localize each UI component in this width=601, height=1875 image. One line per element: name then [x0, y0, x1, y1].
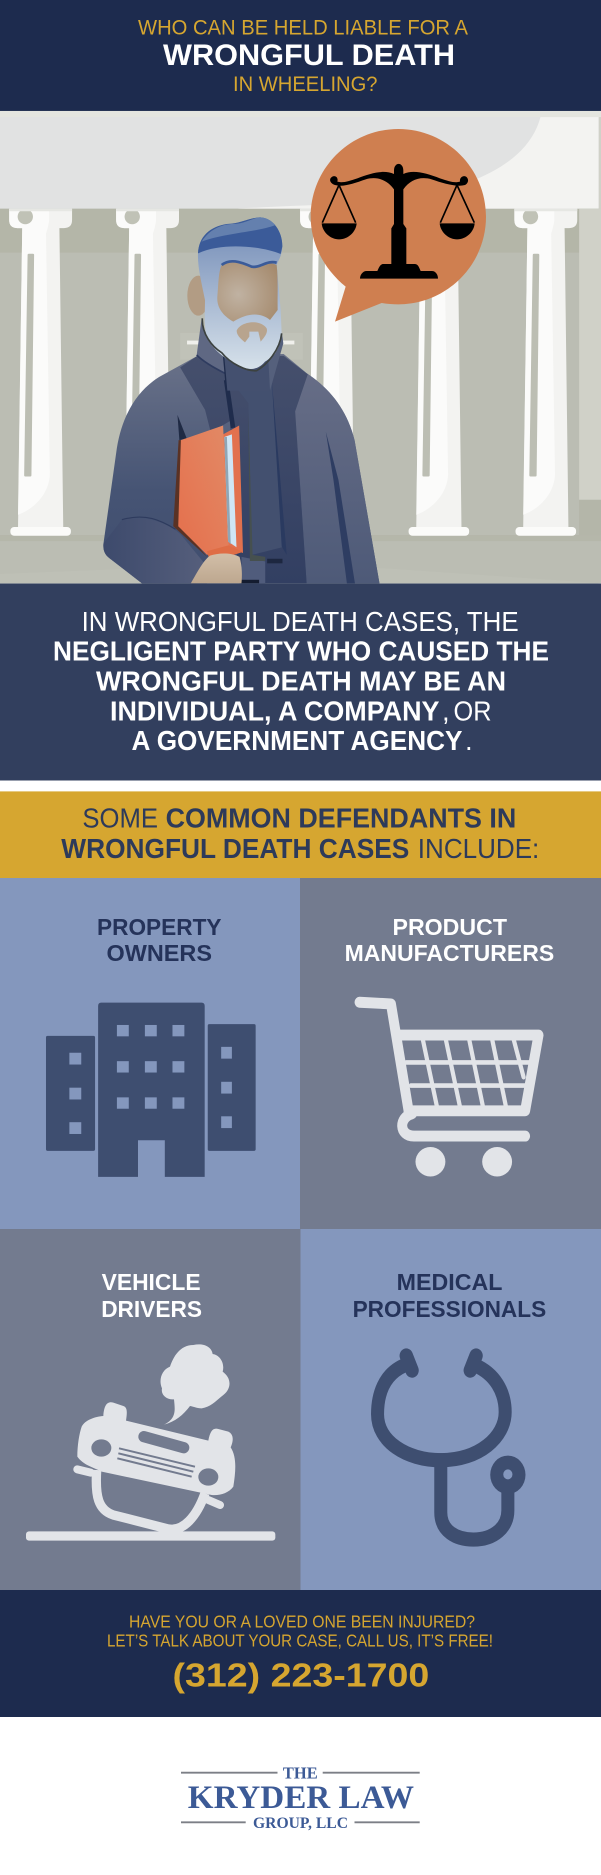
label: DRIVERS: [101, 1296, 202, 1322]
coat inner panel: [180, 356, 308, 583]
courthouse wall and floor: [0, 111, 601, 583]
panel: vehicle drivers: [0, 1229, 300, 1590]
logo: the kryder law group: [181, 1764, 420, 1832]
phone number: (312) 223-1700: [172, 1658, 429, 1695]
icon: overturned car with smoke: [26, 1344, 275, 1541]
line 5: .: [465, 725, 473, 756]
line 1: IN WRONGFUL DEATH CASES, THE: [82, 606, 519, 637]
heading line 1: SOME: [82, 803, 158, 834]
heading line 1: COMMON DEFENDANTS IN: [166, 803, 516, 834]
label: [101, 1269, 202, 1322]
header panel: [0, 0, 601, 111]
scales icon: [322, 164, 475, 279]
line 5: A GOVERNMENT AGENCY: [132, 725, 462, 756]
logo word: kryder law: KRYDER LAW: [188, 1780, 414, 1816]
label: PROPERTY: [97, 914, 222, 940]
icon: shopping cart: [360, 1002, 539, 1176]
label: PRODUCT: [392, 914, 507, 940]
sleeve: [103, 518, 207, 583]
line 4: INDIVIDUAL, A COMPANY: [110, 695, 440, 726]
scarf: [228, 377, 285, 555]
label: [97, 914, 222, 966]
blue cap of hair: [198, 217, 282, 254]
bubble: [311, 129, 486, 322]
heading line 2: WRONGFUL DEATH CASES: [61, 833, 409, 864]
line 4: OR: [454, 695, 492, 726]
panel: intro statement: [0, 584, 601, 780]
label: VEHICLE: [102, 1269, 201, 1295]
speech bubble with scales of justice: [311, 129, 486, 322]
mouth: [237, 322, 267, 342]
man in coat with book: [103, 354, 379, 583]
panel: courthouse illustration: [0, 111, 601, 583]
panel: defendants heading band: [0, 791, 601, 878]
coat lower left piece: [241, 557, 265, 583]
book: [173, 426, 243, 558]
label: MANUFACTURERS: [345, 940, 554, 966]
logo word: the: THE: [283, 1764, 318, 1782]
icon: buildings: [46, 1003, 256, 1177]
label: PROFESSIONALS: [353, 1296, 546, 1322]
coat: [103, 354, 379, 583]
man's head: [187, 217, 283, 391]
coat right fold: [326, 432, 355, 583]
coat right panel: [295, 374, 379, 583]
icon: stethoscope: [378, 1356, 525, 1540]
line 3: WRONGFUL DEATH MAY BE AN: [96, 665, 506, 696]
heading line: in wheeling: IN WHEELING?: [233, 72, 378, 96]
entablature: [0, 111, 601, 209]
hair and beard: [198, 217, 282, 369]
panel: call to action: [0, 1590, 601, 1717]
face: [217, 261, 278, 322]
label: [345, 914, 554, 966]
heading line: who can be held liable: WHO CAN BE HELD LIABLE FOR A: [138, 16, 469, 40]
logo word: group llc: GROUP, LLC: [253, 1815, 348, 1832]
label: OWNERS: [106, 940, 212, 966]
invitation text: LET’S TALK ABOUT YOUR CASE, CALL US, IT’S FREE!: [107, 1630, 493, 1650]
columns: [9, 209, 577, 536]
label: [353, 1269, 546, 1322]
line 2: NEGLIGENT PARTY WHO CAUSED THE: [53, 636, 549, 666]
question text: HAVE YOU OR A LOVED ONE BEEN INJURED?: [129, 1611, 475, 1631]
hand: [191, 554, 242, 583]
panel: property owners: [0, 878, 300, 1229]
collar: [197, 318, 283, 391]
heading line 2: INCLUDE:: [418, 833, 539, 864]
panel: product manufacturers: [300, 878, 601, 1229]
panel: medical professionals: [300, 1229, 601, 1590]
ear: [187, 276, 209, 316]
heading line: wrongful death: WRONGFUL DEATH: [163, 39, 455, 72]
line 4: ,: [442, 695, 450, 726]
beard outline: [202, 318, 282, 371]
label: MEDICAL: [397, 1269, 503, 1295]
